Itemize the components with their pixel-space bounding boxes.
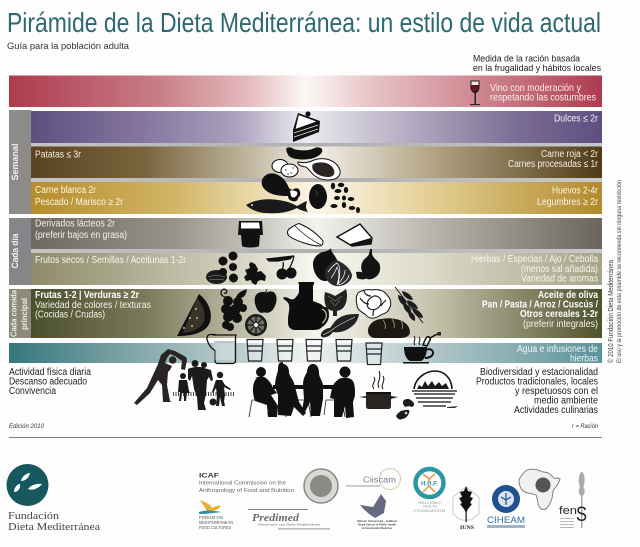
icon: person stretching (134, 349, 187, 405)
icon: cheese wedge (288, 224, 323, 246)
band: dairy (31, 218, 602, 249)
wine text (490, 83, 596, 104)
band: fruit, vegetables, cereals: Otros cereales 1-2r (520, 309, 598, 320)
band: fruit, vegetables, cereals (31, 289, 602, 338)
icon: chard leaf (321, 314, 359, 337)
icon: market basket (411, 371, 458, 408)
band: nuts, herbs: Frutos secos / Semillas / Aceitunas 1-2r (35, 255, 187, 266)
icon: wheat (395, 287, 423, 323)
band: fruit, vegetables, cereals: Aceite de oliva (538, 290, 598, 301)
lifestyle text left (9, 367, 91, 397)
copyright vertical (607, 180, 623, 363)
legend: r = ración: r = Ración (572, 423, 598, 430)
main meal tab: principal (20, 298, 29, 330)
icon: cake (293, 111, 320, 142)
weekly tab: Semanal (10, 144, 20, 180)
main meal tab: Cada comida (10, 289, 18, 337)
lifestyle text left: Actividad física diaria (9, 367, 91, 378)
logo: Hellenic Health Foundation (414, 469, 446, 513)
icon: cheese block (337, 224, 372, 246)
daily tab: Cada día (10, 233, 20, 268)
logo: FENS: S (576, 503, 587, 526)
lifestyle text right (476, 367, 598, 416)
icon: yogurt (238, 221, 263, 248)
logo: Forum on Mediterranean Food Cultures: FORUM ON (199, 515, 223, 520)
icon: orange (245, 314, 267, 336)
band: meat and potatoes (31, 146, 602, 178)
logo: ICAF (199, 472, 294, 494)
icon: egg (309, 184, 327, 209)
logo: IUNS: IUNS (460, 526, 474, 531)
band: poultry, fish, eggs, legumes: Pescado / Marisco ≥ 2r (35, 197, 124, 208)
logo: FENS (559, 472, 587, 528)
icon: chicken leg (262, 173, 300, 201)
lifestyle text left: Descanso adecuado (9, 376, 87, 388)
logo: Hellenic Health Foundation: HEALTH (423, 504, 437, 508)
icon: mushrooms (396, 399, 414, 420)
panel: weekly (9, 110, 602, 214)
icon: sausage (286, 147, 322, 160)
logo: IUNS (453, 486, 479, 531)
logo: Forum on Mediterranean Food Cultures: FOOD CULTURES (199, 525, 231, 530)
logo: ICAF: ICAF (199, 472, 219, 480)
icon: wine glass (470, 80, 480, 105)
band: fruit, vegetables, cereals: Variedad de colores / texturas (35, 300, 151, 311)
icon: cabbage (356, 290, 391, 318)
panel: water band (9, 343, 602, 364)
serving size note: Medida de la ración basada (473, 54, 581, 64)
band: nuts, herbs: (menos sal añadida) (521, 264, 598, 275)
panel: every main meal (9, 289, 602, 338)
band: nuts, herbs: Hierbas / Especias / Ajo / Cebolla (471, 254, 598, 265)
icon: teacup (403, 332, 441, 364)
logo: Fundación Dieta Mediterránea: Dieta Mediterránea (8, 522, 100, 533)
icon: family meal silhouettes (249, 362, 355, 418)
logo: Tehran University: & Community Medicine (362, 526, 392, 530)
band: poultry, fish, eggs, legumes: Legumbres ≥ 2r (537, 197, 599, 208)
logo: CIHEAM: CIHEAM (487, 515, 525, 525)
band: fruit, vegetables, cereals: (preferir integrales) (523, 319, 598, 330)
band: fruit, vegetables, cereals: (Cocidas / Crudas) (35, 310, 105, 320)
icon: garlic (356, 249, 380, 279)
lifestyle text right: medio ambiente (534, 396, 598, 406)
band: sweets: Dulces ≤ 2r (554, 114, 599, 124)
serving size note (473, 54, 601, 74)
band: poultry, fish, eggs, legumes: Huevos 2-4r (552, 186, 599, 196)
logo: ICAF: Anthropology of Food and Nutrition (199, 488, 294, 494)
logo: Tehran University: Tehran University - Isfahan (357, 519, 397, 523)
band: meat and potatoes: Carne roja < 2r (541, 149, 599, 160)
band: fruit, vegetables, cereals: Pan / Pasta / Arroz / Cuscús / (482, 300, 598, 310)
copyright vertical: © 2010 Fundación Dieta Mediterránea (607, 260, 615, 363)
logo: Tehran University: Royal School of Public Health (358, 522, 396, 526)
divider rule (9, 437, 602, 438)
lifestyle text left: Convivencia (9, 386, 56, 397)
panel: wine band (9, 76, 602, 107)
band: meat and potatoes: Patatas ≤ 3r (35, 150, 82, 160)
edition note: Edición 2010 (9, 423, 44, 430)
band: poultry, fish, eggs, legumes: Carne blanca 2r (35, 185, 97, 196)
logo: Forum on Mediterranean Food Cultures (199, 500, 233, 530)
daily tab (9, 218, 31, 285)
logo: Ciiscam: Ciiscam (363, 476, 396, 484)
logo: Hellenic Health Foundation: FOUNDATION (414, 509, 446, 513)
band: nuts, herbs: Variedad de aromas (521, 274, 598, 284)
logo: Ciiscam (346, 468, 400, 490)
icon: olives (267, 256, 296, 280)
logo: Hellenic Health Foundation: H.H.F. (421, 482, 438, 488)
icon: cooking pot (359, 371, 398, 409)
logo: FENS: fen (559, 505, 577, 517)
panel: water band: hierbas (570, 354, 598, 364)
weekly tab (9, 110, 31, 214)
subtitle: Guía para la población adulta (7, 41, 130, 52)
band: dairy: Derivados lácteos 2r (35, 218, 116, 230)
lifestyle text right: y respetuosos con el (515, 386, 598, 397)
icon: fish (246, 199, 308, 213)
logo: Hellenic Health Foundation: HELLENIC (418, 501, 442, 505)
wine text: Vino con moderación y (490, 83, 581, 94)
icon: grapes (221, 289, 247, 331)
icon: walnut (206, 270, 227, 284)
logo: Predimed: Predimed (252, 513, 300, 524)
logo: Forum on Mediterranean Food Cultures: MEDITERRANEAN (199, 520, 233, 525)
icon: seeds (218, 252, 238, 282)
logo: Tehran University (357, 494, 397, 530)
copyright vertical: El uso y la promoción de esta pirámide se recomienda sin ninguna restricción (617, 180, 623, 363)
panel: water band: Agua e infusiones de (517, 344, 598, 355)
icon: herb (244, 262, 266, 285)
band: nuts, herbs (31, 253, 602, 285)
panel: daily (9, 218, 602, 285)
band: meat and potatoes: Carnes procesadas ≤ 1r (508, 159, 599, 170)
main meal tab (9, 289, 31, 338)
icon: artichoke (324, 289, 347, 316)
band: fruit, vegetables, cereals: Frutas 1-2 | Verduras ≥ 2r (35, 290, 139, 301)
logo: Fundación Dieta Mediterránea (6, 464, 100, 533)
icon: glasses of water (247, 340, 382, 364)
logo: Predimed (248, 509, 330, 529)
lifestyle text right: Biodiversidad y estacionalidad (480, 367, 598, 378)
wine text: respetando las costumbres (490, 92, 596, 104)
icon: steak (298, 159, 340, 180)
logo: Fundación Dieta Mediterránea: Fundación (8, 511, 60, 522)
logo: university seal (304, 469, 338, 503)
icon: bread (368, 318, 410, 338)
band: poultry, fish, eggs, legumes (31, 182, 602, 214)
lifestyle text right: Actividades culinarias (514, 405, 598, 416)
serving size note: en la frugalidad y hábitos locales (473, 63, 601, 74)
logo: ICAF: International Commission on the (199, 480, 286, 486)
icon: apple (255, 290, 276, 312)
logo: Predimed: Prevención con Dieta Mediterránea (258, 524, 321, 526)
band: sweets (31, 111, 602, 143)
icon: olive oil jug (283, 282, 329, 330)
lifestyle text right: Productos tradicionales, locales (476, 376, 598, 388)
band: dairy: (preferir bajos en grasa) (35, 230, 127, 241)
logo: CIHEAM (487, 485, 525, 528)
icon: onions (313, 248, 352, 286)
icon: water jug (207, 334, 236, 364)
icon: beans (330, 183, 360, 213)
icon: watermelon (177, 294, 211, 336)
logo: Africa map (519, 469, 560, 510)
icon: family silhouettes (173, 360, 235, 410)
icon: potatoes (272, 160, 298, 177)
